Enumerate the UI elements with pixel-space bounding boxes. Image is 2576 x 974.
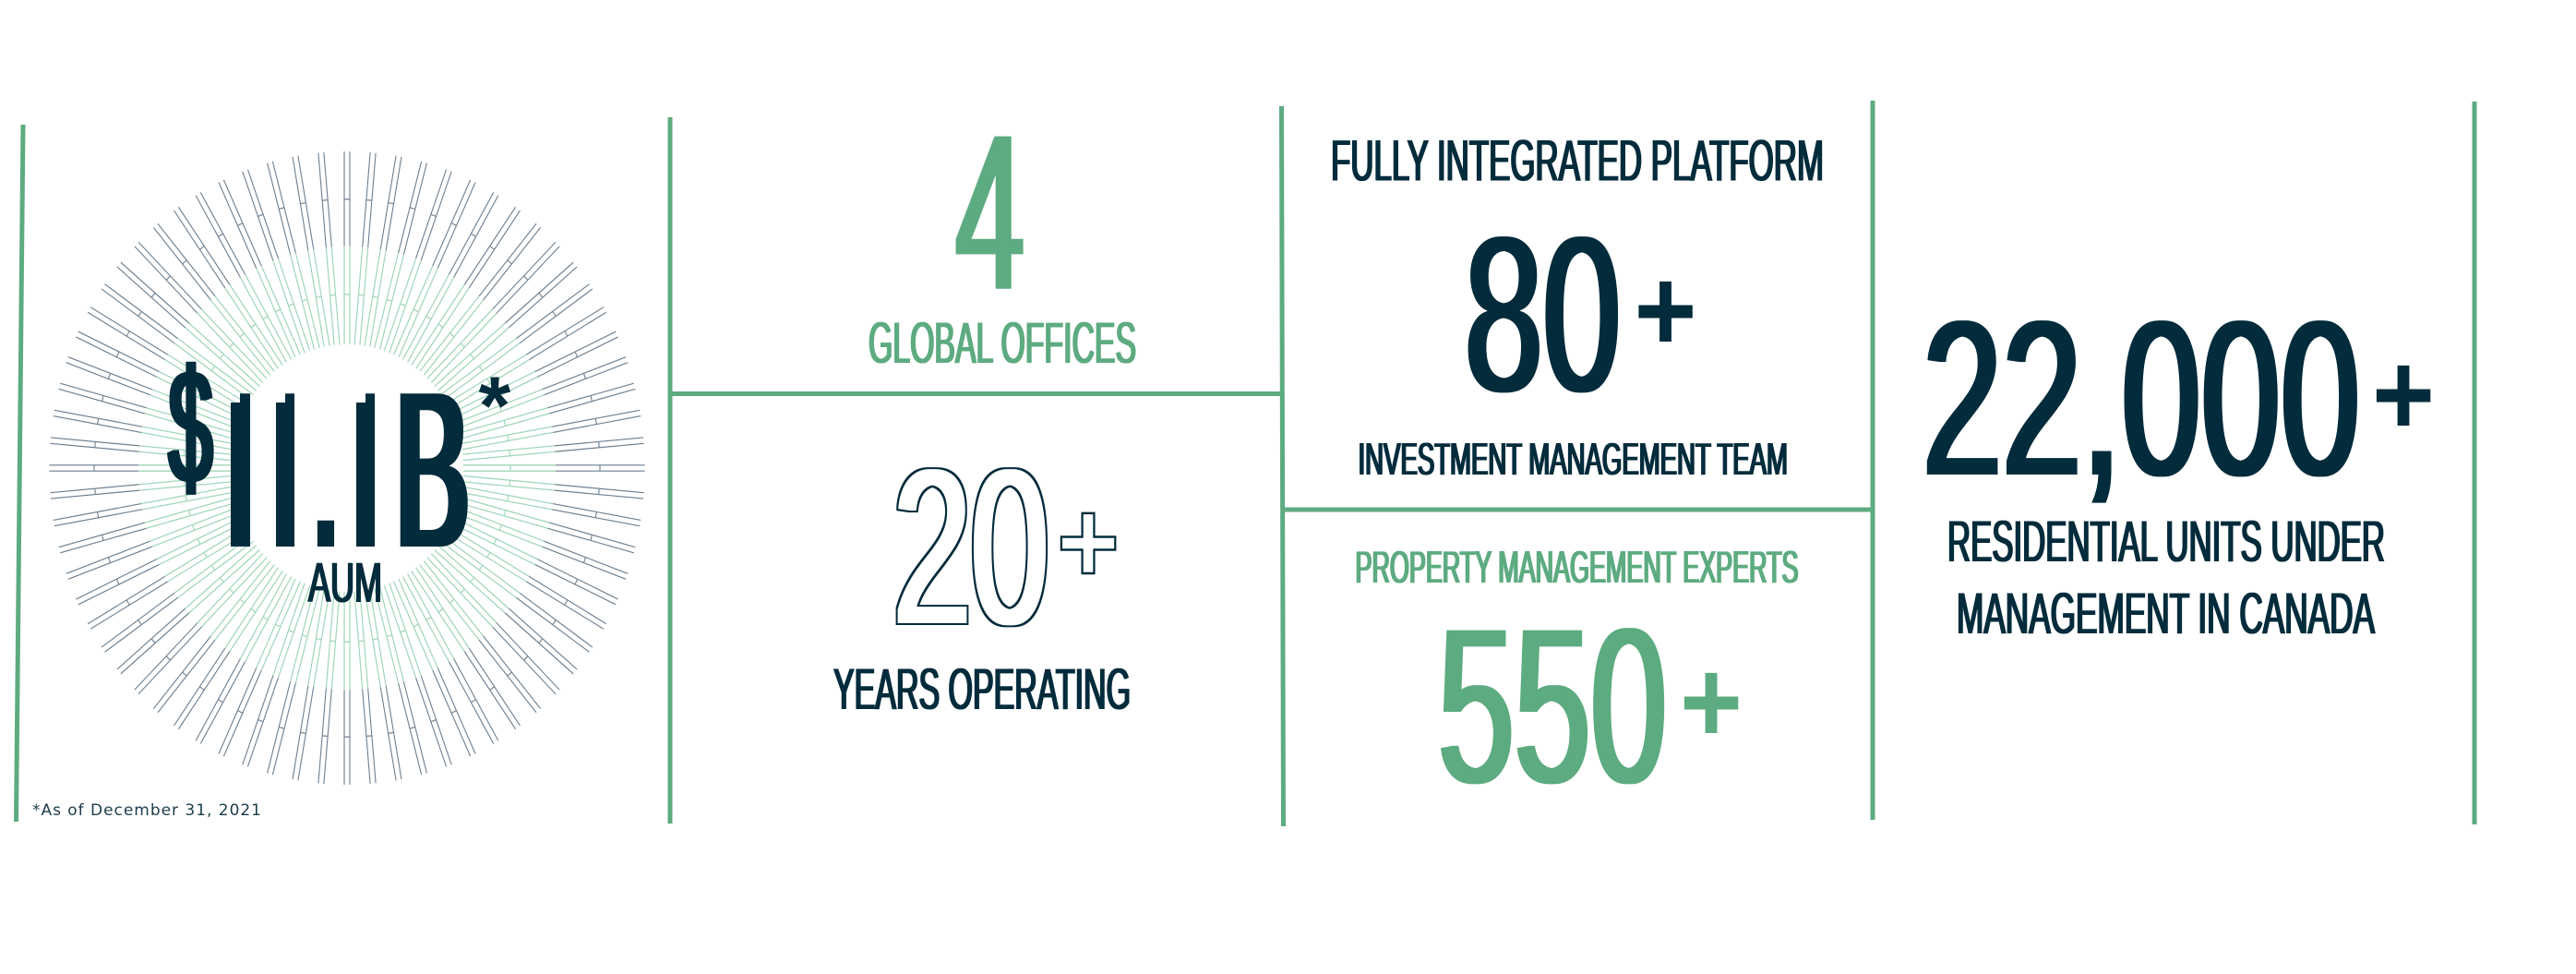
radial sunburst bbox=[49, 151, 645, 785]
panel: investment management team bbox=[1331, 129, 1824, 485]
heading: fully integrated platform: FULLY INTEGRATED PLATFORM bbox=[1331, 129, 1824, 194]
figure: 550+: 550 bbox=[1438, 583, 1667, 829]
panel: property management experts bbox=[1355, 543, 1798, 829]
label: investment management team: INVESTMENT MANAGEMENT TEAM bbox=[1359, 435, 1788, 485]
panel: years operating bbox=[833, 424, 1131, 722]
figure: 20+ outlined: + bbox=[1057, 475, 1120, 607]
headline figure: $11.1B*: B bbox=[396, 346, 469, 595]
figure: 80+: 80 bbox=[1465, 191, 1621, 438]
infographic canvas bbox=[14, 101, 2477, 826]
panel dividers bbox=[17, 101, 2474, 826]
headline figure: $11.1B*: 1 bbox=[225, 344, 337, 595]
headline figure: $11.1B* bbox=[166, 362, 511, 547]
label: property management experts: PROPERTY MANAGEMENT EXPERTS bbox=[1355, 543, 1798, 593]
panel: assets under management bbox=[32, 151, 645, 820]
headline figure: $11.1B*: 1 bbox=[306, 344, 417, 595]
headline figure: $11.1B*: $ bbox=[169, 334, 212, 519]
figure: 22,000+: + bbox=[2372, 328, 2435, 460]
panel: residential units bbox=[1923, 275, 2435, 646]
figure: 20+ outlined: 20 bbox=[893, 424, 1048, 670]
headline figure: $11.1B*: * bbox=[479, 359, 511, 451]
figure: 550+: + bbox=[1680, 635, 1743, 767]
label: global offices: GLOBAL OFFICES bbox=[869, 311, 1136, 376]
panel: global offices bbox=[869, 89, 1136, 376]
footnote: *As of December 31, 2021 bbox=[32, 801, 261, 820]
headline figure: $11.1B*: 1 bbox=[181, 344, 292, 595]
figure: 4: 4 bbox=[956, 89, 1024, 336]
figure: 80+: + bbox=[1634, 244, 1697, 376]
headline figure: $11.1B*: . bbox=[309, 389, 342, 584]
label: years operating: YEARS OPERATING bbox=[833, 657, 1131, 722]
label: AUM: AUM bbox=[308, 551, 382, 614]
